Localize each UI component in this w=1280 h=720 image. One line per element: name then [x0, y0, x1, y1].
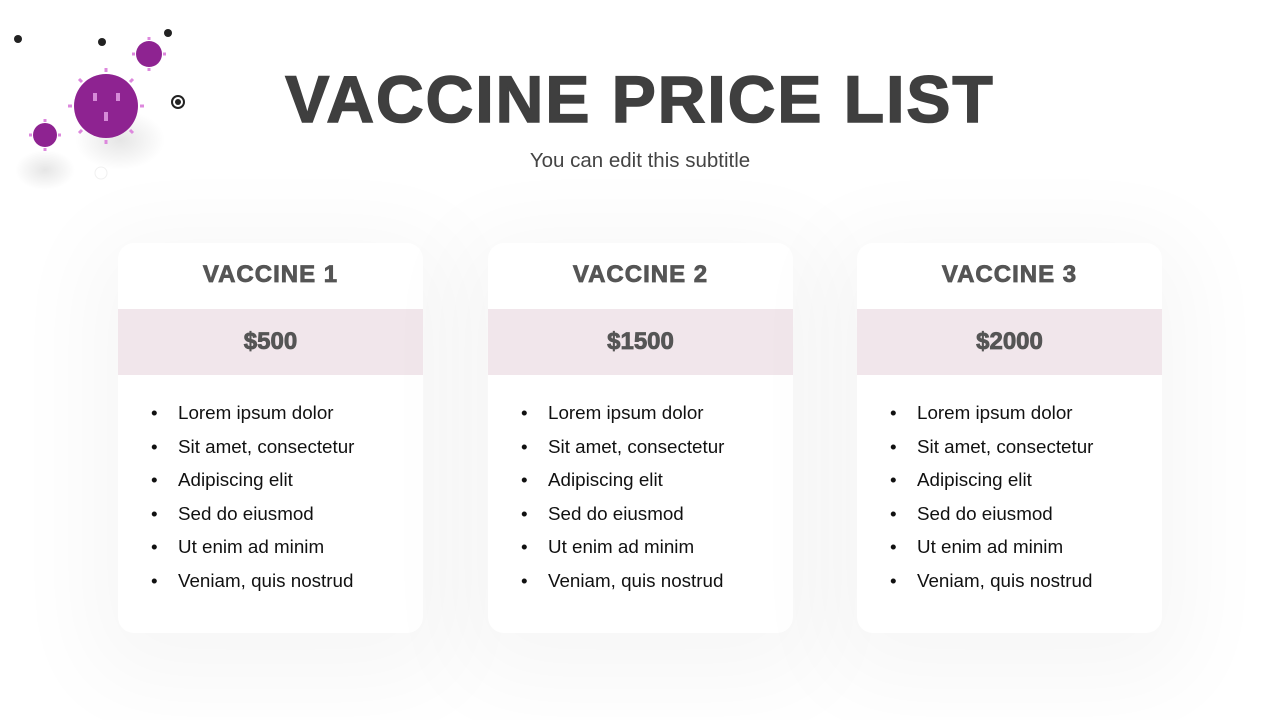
panel: vaccine 1: Sed do eiusmod	[178, 503, 314, 524]
panel: vaccine 1: Sit amet, consectetur	[178, 436, 354, 457]
panel: vaccine 3: Sit amet, consectetur	[917, 436, 1093, 457]
title: VACCINE PRICE LIST	[285, 62, 995, 136]
panel: vaccine 3: $2000	[976, 328, 1043, 355]
panel: vaccine 2: VACCINE 2	[573, 261, 708, 288]
panel: vaccine 2: Sit amet, consectetur	[548, 436, 724, 457]
panel: vaccine 1: $500	[244, 328, 297, 355]
panel: vaccine 2: $1500	[607, 328, 674, 355]
decoration: viruses	[14, 29, 185, 184]
panel: vaccine 2: Veniam, quis nostrud	[548, 570, 723, 591]
panel: vaccine 3: Sed do eiusmod	[917, 503, 1053, 524]
panel: vaccine 3: Ut enim ad minim	[917, 536, 1063, 557]
panel: vaccine 1: Ut enim ad minim	[178, 536, 324, 557]
subtitle: You can edit this subtitle	[530, 149, 750, 172]
panel: vaccine 3: Veniam, quis nostrud	[917, 570, 1092, 591]
panel: vaccine 2: Lorem ipsum dolor	[548, 402, 704, 423]
panel: vaccine 3: VACCINE 3	[942, 261, 1077, 288]
panel: vaccine 3	[857, 243, 1162, 633]
panel: vaccine 3: Lorem ipsum dolor	[917, 402, 1073, 423]
panel: vaccine 2: Ut enim ad minim	[548, 536, 694, 557]
panel: vaccine 1: Lorem ipsum dolor	[178, 402, 334, 423]
panel: vaccine 1: VACCINE 1	[203, 261, 338, 288]
panel: vaccine 1	[118, 243, 423, 633]
panel: vaccine 2: Adipiscing elit	[548, 469, 663, 490]
panel: vaccine 2	[488, 243, 793, 633]
panel: vaccine 1: Adipiscing elit	[178, 469, 293, 490]
panel: vaccine 2: Sed do eiusmod	[548, 503, 684, 524]
panel: vaccine 1: Veniam, quis nostrud	[178, 570, 353, 591]
panel: vaccine 3: Adipiscing elit	[917, 469, 1032, 490]
